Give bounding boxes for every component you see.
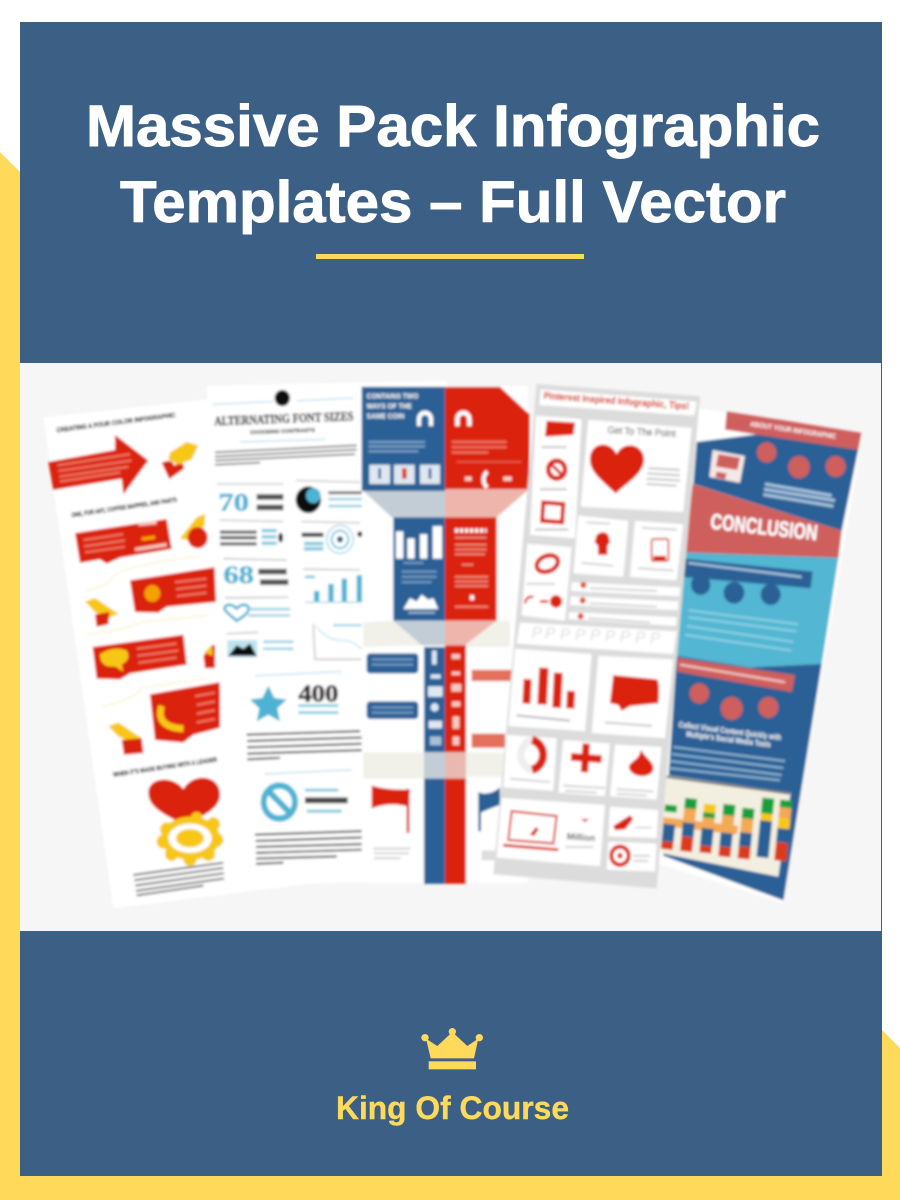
- sheet 4: pinterest inspired infographic: P: [532, 625, 542, 642]
- sheet 2: alternating font sizes: 68: [223, 562, 254, 589]
- sheet 1: four colour infographic: [43, 382, 433, 908]
- sheet 4: pinterest inspired infographic: P: [635, 630, 646, 647]
- sheet 4: pinterest inspired infographic: Million: [567, 831, 595, 843]
- sheet 2: alternating font sizes: ALTERNATING FONT SIZES: [214, 409, 354, 428]
- sheet 2: alternating font sizes: 70: [218, 489, 249, 516]
- banner: about your infographic: [725, 411, 862, 450]
- sheet 1: four colour infographic: WHEN IT'S MADE BUYING WITH A LEADER: [113, 756, 218, 779]
- sheet 4: pinterest inspired infographic: Get To The Point: [607, 425, 676, 440]
- icon: crown: [421, 1028, 483, 1069]
- blue half top: SAME COIN: [367, 413, 404, 420]
- sheet 4: pinterest inspired infographic: P: [560, 626, 571, 643]
- sheet 2: alternating font sizes: [207, 381, 447, 886]
- sheet 5: conclusion infographic: Collect Visual Content Quickly with: [678, 720, 782, 742]
- stacked bar chart: [661, 775, 792, 877]
- title underline: [316, 254, 584, 259]
- sheet 4: pinterest inspired infographic: P: [650, 630, 661, 648]
- sheet 3: centre red and blue funnel infographic: [362, 386, 529, 884]
- right edge of image: [881, 363, 882, 931]
- sheet 4: pinterest inspired infographic: P: [620, 629, 631, 646]
- collage image panel: [20, 363, 881, 931]
- blue half top: WAYS OF THE: [367, 403, 412, 411]
- sheet 4: pinterest inspired infographic: P: [605, 628, 616, 646]
- red half top: [445, 387, 529, 884]
- sheet 2: alternating font sizes: 400: [298, 681, 338, 708]
- brand name: King Of Course: [336, 1090, 569, 1126]
- blue half top: CONTAINS TWO: [367, 394, 419, 401]
- title: Templates – Full Vector: [120, 170, 786, 235]
- sheet 4: pinterest inspired infographic: Pinterest Inspired Infographic, Tips!: [543, 391, 690, 413]
- title: Massive Pack Infographic: [86, 94, 820, 159]
- sheet 5: conclusion infographic: CONCLUSION: [709, 510, 819, 545]
- sheet 5: conclusion infographic: [650, 402, 863, 903]
- sheet 1: four colour infographic: ONE, FOR ART, COFFEE MAPPED, AND PARTS: [71, 497, 178, 519]
- sheet 2: alternating font sizes: CHOOSING CONTRASTS: [250, 428, 316, 436]
- sheet 4: pinterest inspired infographic: [493, 384, 700, 888]
- sheet 5: conclusion infographic: ABOUT YOUR INFOGRAPHIC: [750, 421, 837, 441]
- sheet 4: pinterest inspired infographic: P: [545, 625, 556, 643]
- sheet 4: pinterest inspired infographic: P: [575, 627, 586, 644]
- sheet 1: four colour infographic: CREATING A FOUR COLOR INFOGRAPHIC: [56, 412, 176, 434]
- title: [86, 94, 820, 235]
- sheet 5: conclusion infographic: Multiple's Social Media Tools: [686, 729, 772, 749]
- sheet 4: pinterest inspired infographic: P: [590, 627, 601, 645]
- blue half top: [362, 387, 445, 884]
